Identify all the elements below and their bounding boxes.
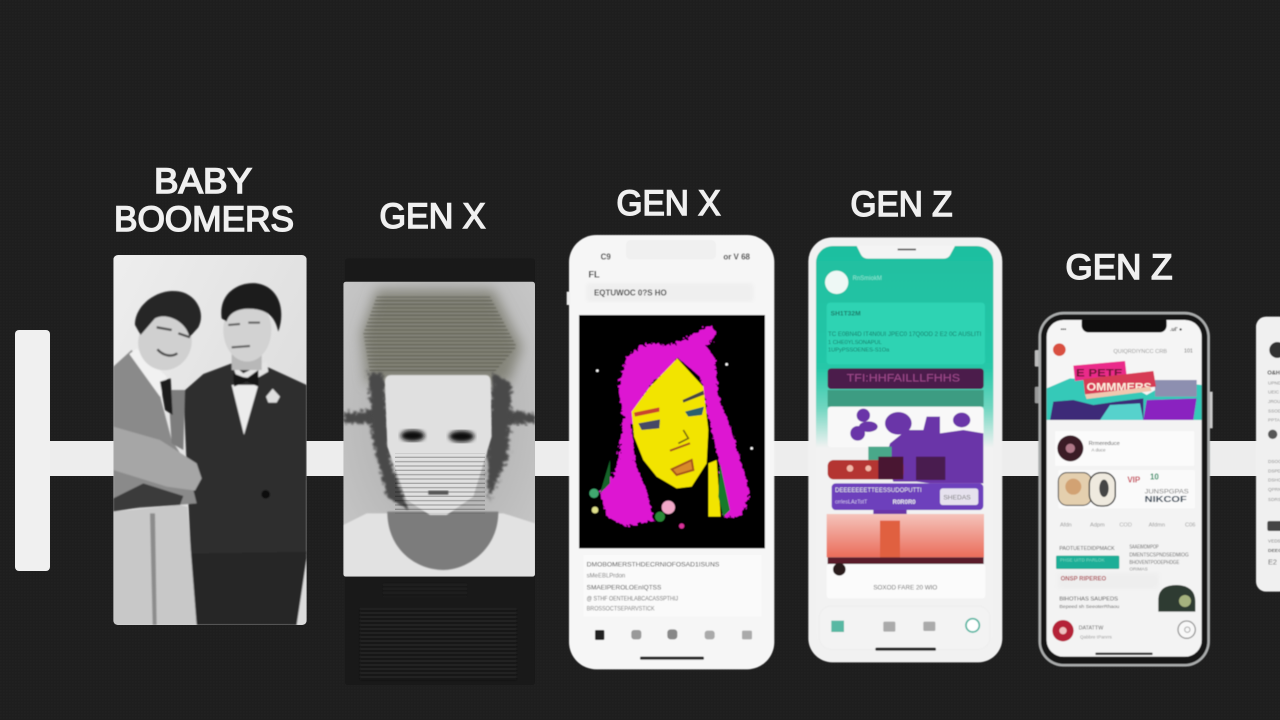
action card	[827, 563, 985, 598]
offer rows: ONSP RIPEREO	[1061, 577, 1106, 583]
navigation icons	[819, 606, 990, 649]
description text	[583, 555, 762, 617]
portrait image	[343, 282, 535, 577]
heading: gen x first: GEN X	[380, 197, 486, 236]
phone: gen x portrait app: FL	[588, 269, 600, 279]
timeline axis	[15, 330, 1280, 571]
phone: gen z teal app	[808, 237, 1002, 662]
phone: gen z dark frame app: .uI' ●	[1170, 327, 1182, 333]
product row: VIP	[1127, 476, 1141, 485]
navigation icons	[595, 629, 752, 640]
phone: gen z dark frame app: Afdmn	[1149, 523, 1165, 529]
product row: JUNSPGPAS	[1145, 489, 1189, 496]
description text: BROSSOCTSEPARVSTICK	[587, 607, 655, 613]
phone: gen z dark frame app: Adpm	[1090, 523, 1105, 529]
heading: boomers: BOOMERS	[114, 200, 294, 239]
phone: cropped at right edge: PPTA	[1268, 418, 1280, 423]
text and green button: BHOVENTPOOEPHDGE	[1129, 560, 1180, 566]
action card: SOXOD FARE 20 WIO	[873, 584, 937, 591]
offer rows: BIHOTHAS SAUPEDS	[1059, 596, 1118, 602]
product row	[1058, 470, 1195, 508]
phone: gen z dark frame app: 101	[1184, 348, 1193, 354]
description text: SMAEIPEROLOEnIQTSS	[587, 584, 661, 591]
text and green button	[1056, 544, 1189, 572]
description text: DMOBOMERSTHDECRNIOFOSAD1ISUNS	[587, 562, 720, 569]
description text: @ STHF OENTEHLABCACASSPTHIJ	[587, 597, 678, 603]
phone: cropped at right edge: E2	[1268, 557, 1277, 566]
heading: baby boomers: BABY	[154, 162, 252, 201]
collage image: SHEDAS	[943, 494, 971, 501]
product row: NIKCOF	[1145, 495, 1187, 504]
teal info card: TC E0BN4D IT4N0UI JPEC0 17Q0OD 2 E2 0C AUSLITI	[828, 332, 982, 338]
bottom profile row: DATATTW	[1079, 625, 1104, 631]
profile row: A duce	[1091, 448, 1106, 453]
scanlined caption block	[360, 583, 517, 680]
phone: gen x portrait app	[567, 235, 774, 669]
text and green button: PAOTUETEDIDPMACK	[1059, 546, 1115, 552]
phone: gen z dark frame app: COD	[1119, 523, 1132, 529]
phone: cropped at right edge: UEIC	[1268, 390, 1280, 395]
teal info card	[827, 303, 985, 364]
description text: sMeEBLPrdon	[587, 574, 625, 580]
phone: cropped at right edge	[1256, 317, 1280, 592]
product row: 10	[1150, 472, 1159, 481]
phone: cropped at right edge: O&H	[1267, 370, 1280, 376]
phone: gen z dark frame app: QUIQRDIYNCC CRB	[1113, 349, 1167, 355]
phone: gen x portrait app: C9	[601, 252, 611, 261]
phone: gen z dark frame app: C06	[1185, 523, 1195, 529]
collage banner	[1047, 361, 1202, 420]
teal info card: SH1T32M	[831, 311, 861, 318]
teal info card: 1UPyPSSOENES-S1Oa	[828, 348, 890, 354]
phone: gen x portrait app: or V 68	[723, 252, 751, 261]
text and green button: ORIMAS	[1129, 567, 1148, 572]
offer rows: Bepeed sh SeeoterRhaou	[1059, 604, 1120, 609]
pixel portrait	[579, 315, 765, 548]
collage image: TFI:HHFAILLLFHHS	[847, 373, 960, 385]
photo: baby boomers couple	[113, 255, 307, 625]
teal info card: 1 CHE0YLSONAPUL	[828, 340, 882, 346]
phone: gen z dark frame app	[1035, 312, 1213, 667]
collage image	[827, 368, 984, 564]
heading: gen x second: GEN X	[616, 184, 720, 223]
text and green button: PHSE UITD PARLOK	[1060, 558, 1106, 563]
phone: gen z dark frame app: •••	[1061, 327, 1066, 333]
tab labels: Afdn	[1060, 523, 1072, 529]
dark backing block	[345, 258, 535, 685]
phone: gen x portrait app: EQTUWOC 0?S HO	[594, 288, 667, 297]
collage banner: E PETE	[1076, 368, 1123, 380]
phone: gen z teal app: RnSmiokM	[853, 276, 882, 282]
collage image: crrlesLAzTstT	[835, 499, 868, 505]
profile row: Rrmereduce	[1089, 441, 1120, 447]
profile row	[1056, 434, 1120, 462]
collage image: DEEEEEEETTEESSUDOPUTTI	[835, 487, 922, 494]
heading: gen z second: GEN Z	[1066, 248, 1172, 287]
text and green button: DMENTSCSPNDSEDMIOG	[1129, 552, 1189, 558]
photo: distorted gen x portrait	[343, 258, 535, 685]
heading: gen z first: GEN Z	[850, 185, 952, 224]
bottom profile row: Qabbre tPanrrs	[1080, 634, 1113, 639]
collage image: R0R0R0	[893, 500, 916, 506]
text and green button: SAAEIMDMPOP	[1129, 544, 1159, 550]
collage banner: OMMMERS	[1087, 381, 1152, 393]
offer rows	[1058, 573, 1195, 612]
bottom profile row	[1052, 620, 1195, 641]
